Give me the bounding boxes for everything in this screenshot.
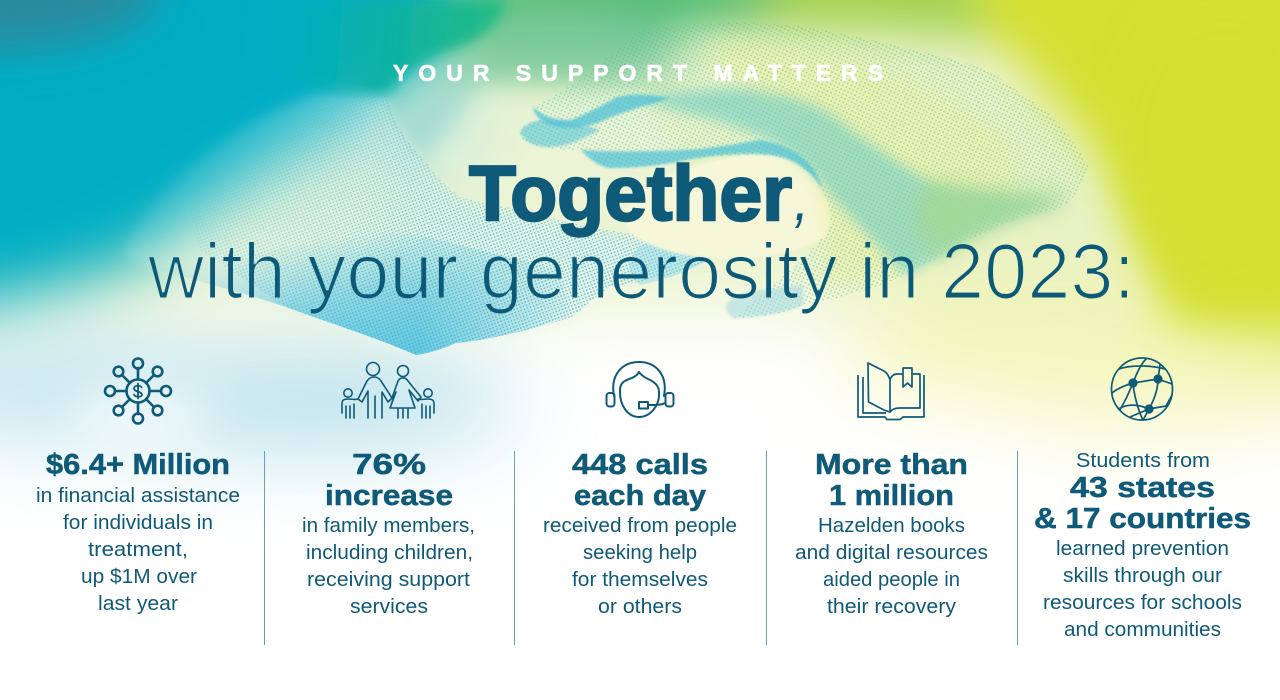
stat: financial assistance: last year	[98, 592, 178, 615]
icon: globe network	[1112, 358, 1172, 420]
stat: students: skills through our	[1063, 564, 1222, 587]
stat: books and resources	[795, 449, 988, 618]
stat: students: and communities	[1064, 618, 1221, 641]
stat: calls each day: 448 calls	[572, 449, 708, 481]
title: with your generosity in 2023: with your generosity in 2023:	[147, 227, 1135, 315]
stat: family members: 76%	[352, 449, 426, 481]
stat: financial assistance: up $1M over	[81, 565, 197, 588]
icon: upper hand, stippled	[520, 23, 1089, 318]
stat: family members	[302, 449, 475, 618]
stat: financial assistance: treatment,	[88, 538, 188, 561]
stat: students: learned prevention	[1056, 537, 1229, 560]
divider	[766, 451, 767, 645]
title: Together: Together	[469, 149, 792, 237]
stat: calls each day: seeking help	[583, 541, 697, 564]
stat: calls each day: for themselves	[572, 568, 708, 591]
icon: headset agent	[606, 362, 674, 417]
stat: family members: receiving support	[307, 568, 470, 591]
stat: students: resources for schools	[1043, 591, 1242, 614]
stat: family members: increase	[325, 480, 453, 512]
stat: students: Students from	[1076, 449, 1210, 472]
stat: calls each day: or others	[598, 595, 682, 618]
stat: books and resources: More than	[815, 449, 968, 481]
stat: books and resources: their recovery	[827, 595, 957, 618]
stat: books and resources: 1 million	[829, 480, 954, 512]
stat: family members: including children,	[306, 541, 473, 564]
icon: family	[342, 362, 434, 418]
stat: students	[1034, 449, 1251, 641]
icon: open book	[858, 363, 924, 420]
stat: books and resources: and digital resources	[795, 541, 988, 564]
stat: financial assistance: for individuals in	[63, 511, 213, 534]
stat: family members: in family members,	[302, 514, 475, 537]
stat: books and resources: Hazelden books	[818, 514, 965, 537]
stat: financial assistance: $6.4+ Million	[46, 449, 230, 481]
divider	[1017, 451, 1018, 645]
icon: network with dollar sign	[105, 358, 171, 424]
stat: family members: services	[350, 595, 428, 618]
heading: your support matters: YOUR SUPPORT MATTERS	[393, 60, 883, 86]
title: Together: ,	[794, 165, 809, 234]
stat: books and resources: aided people in	[823, 568, 960, 591]
stat: financial assistance: in financial assistance	[36, 484, 240, 507]
stat: calls each day: each day	[574, 480, 706, 512]
stat: calls each day: received from people	[543, 514, 737, 537]
divider	[514, 451, 515, 645]
divider	[264, 451, 265, 645]
stat: calls each day	[543, 449, 737, 618]
stat: students: 43 states	[1070, 472, 1215, 504]
stat: financial assistance	[36, 449, 240, 615]
icon: lower hand, stippled	[122, 0, 719, 355]
stat: students: & 17 countries	[1034, 503, 1251, 535]
